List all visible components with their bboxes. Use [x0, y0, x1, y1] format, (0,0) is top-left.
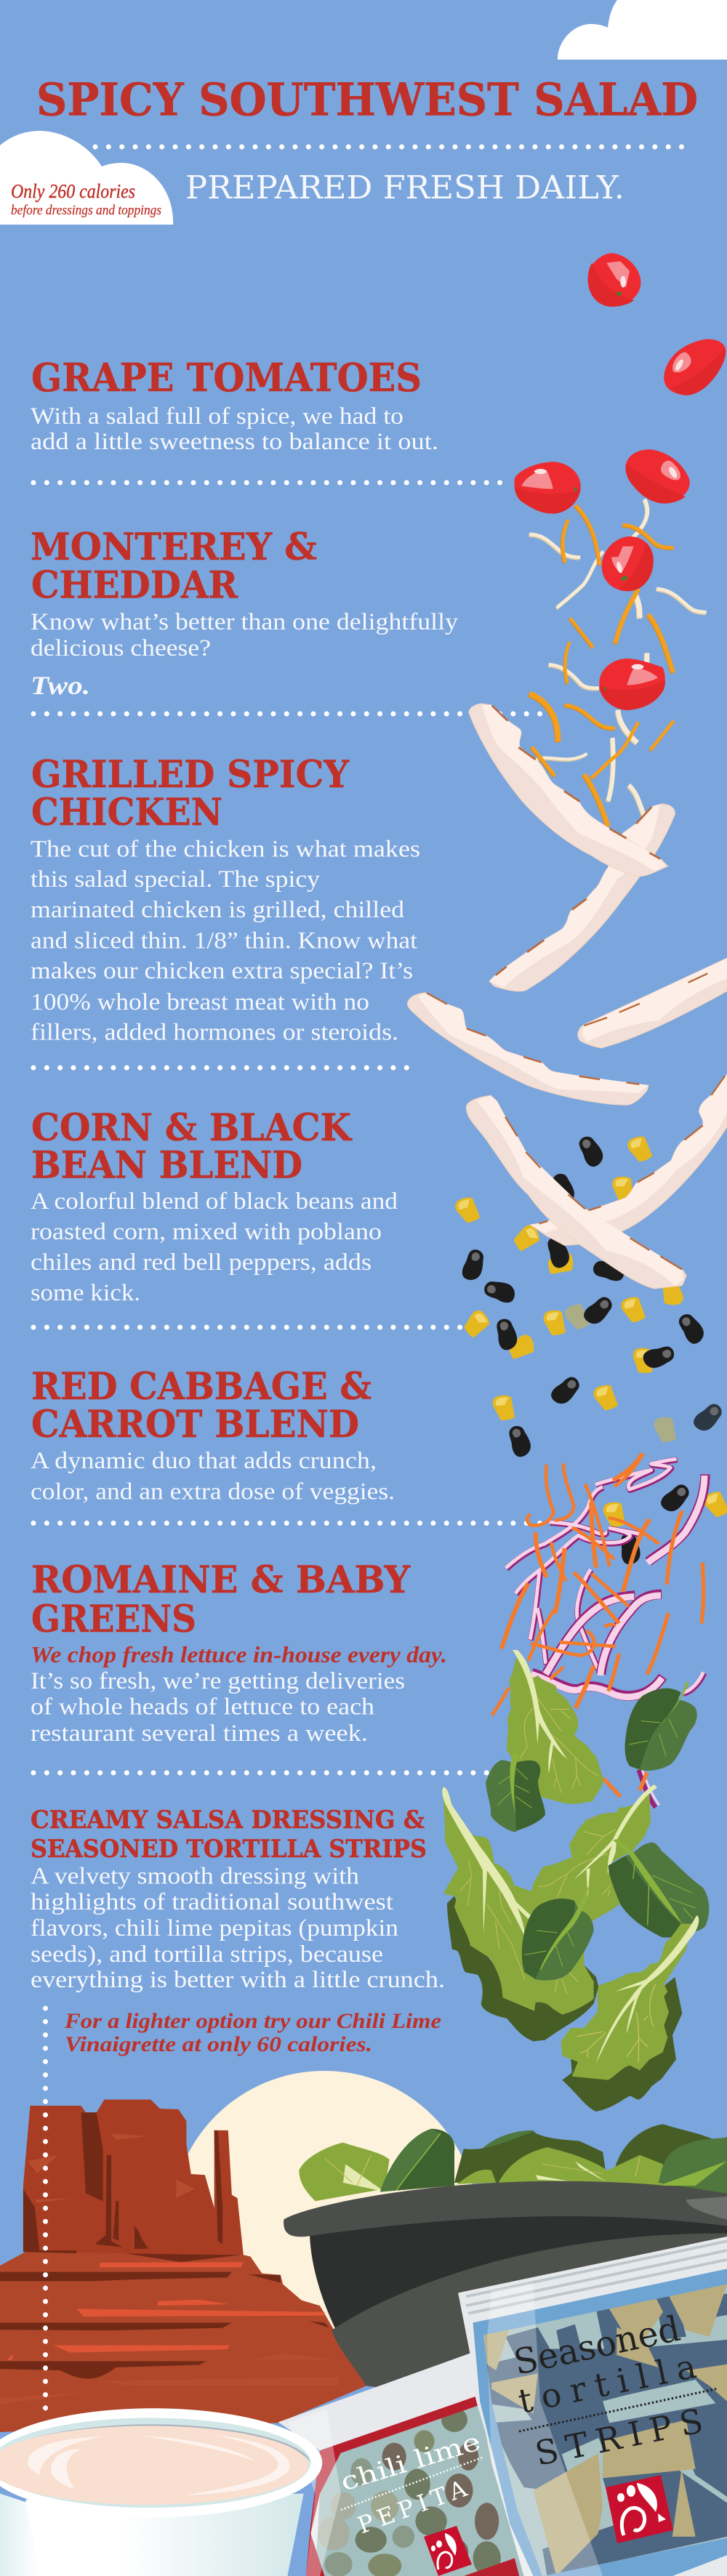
salad in bowl: [299, 2124, 727, 2201]
spinach: large right: [608, 1839, 709, 1938]
body text: color, and an extra dose of veggies.: [31, 1478, 395, 1505]
title: SPICY SOUTHWEST SALAD: [36, 73, 698, 126]
stray shreds: [638, 1770, 656, 1808]
heading: [31, 1365, 371, 1446]
calories note: before dressings and toppings: [11, 203, 161, 218]
body text: A dynamic duo that adds crunch,: [31, 1448, 377, 1474]
body text: highlights of traditional southwest: [31, 1889, 393, 1915]
body text: delicious cheese?: [31, 635, 211, 661]
spinach: lower center: [522, 1888, 594, 1981]
body text: [31, 1864, 445, 1993]
falling tomatoes: among the shreds: [515, 449, 690, 710]
romaine: large left: [442, 1787, 598, 2041]
body text: everything is better with a little crunch.: [31, 1967, 445, 1993]
pepitas bag: [278, 2354, 523, 2576]
spinach: top right: [625, 1681, 697, 1771]
chicken strip: upper, rising: [489, 804, 675, 991]
mesa: [0, 2099, 366, 2432]
heading: [31, 526, 317, 608]
body text: seeds), and tortilla strips, because: [31, 1941, 383, 1968]
heading: CREAMY SALSA DRESSING &: [31, 1806, 425, 1835]
heading: CHICKEN: [31, 791, 222, 834]
tortilla strips label: STRIPS: [531, 2401, 706, 2474]
subtitle: PREPARED FRESH DAILY.: [185, 169, 624, 206]
sun: [171, 2071, 478, 2378]
divider: title dots: [95, 144, 683, 150]
body text: roasted corn, mixed with poblano: [31, 1219, 382, 1245]
heading: RED CABBAGE &: [31, 1365, 371, 1409]
heading: [31, 753, 350, 834]
romaine: top: [507, 1650, 603, 1804]
chicken strip: lower, crossing under: [531, 1074, 727, 1245]
shredded cabbage and carrots: [492, 1454, 705, 1715]
bowl: [284, 2181, 727, 2432]
body text: [31, 1448, 395, 1505]
bottom scene: [0, 2099, 727, 2576]
body text: [31, 1188, 398, 1306]
chicken strip: right edge: [578, 958, 727, 1048]
chicken strip: upper, falling: [469, 704, 667, 876]
heading: SEASONED TORTILLA STRIPS: [31, 1835, 427, 1864]
dressing cup: [0, 2408, 322, 2576]
body text: add a little sweetness to balance it out.: [31, 429, 438, 455]
section: grilled spicy chicken: [31, 753, 420, 1046]
body text: some kick.: [31, 1280, 140, 1306]
section: creamy salsa dressing: [31, 1806, 445, 2056]
logo: tortilla bag: [606, 2475, 673, 2543]
body text: flavors, chili lime pepitas (pumpkin: [31, 1915, 398, 1941]
heading: GRAPE TOMATOES: [31, 355, 422, 401]
chicken strip: left long: [408, 993, 648, 1105]
heading: CARROT BLEND: [31, 1403, 359, 1446]
romaine: center: [531, 1784, 657, 1936]
body text: and sliced thin. 1/8” thin. Know what: [31, 928, 417, 954]
heading: BEAN BLEND: [31, 1144, 302, 1188]
tortilla strips label: [510, 2309, 718, 2543]
body text: fillers, added hormones or steroids.: [31, 1020, 398, 1046]
body text: A colorful blend of black beans and: [31, 1188, 398, 1215]
heading: GRILLED SPICY: [31, 753, 350, 797]
falling tomatoes: upper pair: [588, 253, 726, 395]
body text: this salad special. The spicy: [31, 866, 321, 893]
body text: Know what’s better than one delightfully: [31, 609, 459, 635]
body text: [31, 609, 459, 661]
chicken strip: lower, crossing over: [467, 1095, 686, 1289]
section: red cabbage and carrot blend: [31, 1365, 395, 1505]
heading: CHEDDAR: [31, 564, 238, 608]
tortilla strips label: Seasoned: [510, 2309, 683, 2383]
red callout: vinaigrette: For a lighter option try our Chili Lime: [64, 2009, 441, 2033]
body text: makes our chicken extra special? It’s: [31, 958, 413, 984]
heading: CORN & BLACK: [31, 1106, 353, 1150]
tortilla strips bag: [458, 2237, 727, 2576]
shredded cheese and carrots: [529, 499, 707, 827]
cloud: top right: [558, 0, 727, 60]
heading: [31, 1558, 411, 1641]
pepitas bag label: PEPITA: [354, 2473, 475, 2540]
punchline: Two.: [31, 671, 90, 700]
section: monterey and cheddar: [31, 526, 459, 700]
pepitas bag label: chili lime: [337, 2427, 484, 2497]
romaine: lower right: [561, 1915, 699, 2112]
black beans and corn kernels: [454, 1133, 727, 1565]
body text: A velvety smooth dressing with: [31, 1864, 360, 1890]
pepitas bag label: [337, 2427, 484, 2576]
body text: restaurant several times a week.: [31, 1720, 368, 1747]
body text: [31, 403, 438, 455]
body text: The cut of the chicken is what makes: [31, 837, 420, 863]
chicken strips: [408, 704, 727, 1289]
body text: chiles and red bell peppers, adds: [31, 1249, 371, 1276]
section: corn and black bean blend: [31, 1106, 398, 1306]
tortilla strips label: tortilla: [515, 2346, 699, 2421]
heading: ROMAINE & BABY: [31, 1558, 411, 1602]
red callout: We chop fresh lettuce in-house every day.: [31, 1641, 447, 1667]
spinach: small left: [486, 1753, 545, 1832]
body text: 100% whole breast meat with no: [31, 989, 369, 1015]
heading: [31, 1106, 353, 1188]
lettuce leaves: [442, 1650, 709, 2112]
body text: marinated chicken is grilled, chilled: [31, 897, 405, 923]
heading: [31, 1806, 427, 1864]
heading: GREENS: [31, 1598, 196, 1641]
body text: With a salad full of spice, we had to: [31, 403, 403, 430]
body text: of whole heads of lettuce to each: [31, 1694, 375, 1720]
cloud: calories callout: [0, 131, 173, 225]
red callout: vinaigrette: [64, 2009, 441, 2056]
body text: [31, 837, 420, 1046]
section: grape tomatoes: [31, 355, 438, 455]
body text: [31, 1668, 405, 1747]
logo: pepitas bag: [424, 2526, 472, 2576]
calories figure: Only 260 calories: [11, 180, 135, 202]
dotted vertical line over mesa: [43, 2008, 48, 2410]
heading: MONTEREY &: [31, 526, 317, 569]
section: romaine and baby greens: [31, 1558, 447, 1747]
body text: It’s so fresh, we’re getting deliveries: [31, 1668, 405, 1694]
red callout: vinaigrette: Vinaigrette at only 60 calories.: [65, 2032, 372, 2056]
